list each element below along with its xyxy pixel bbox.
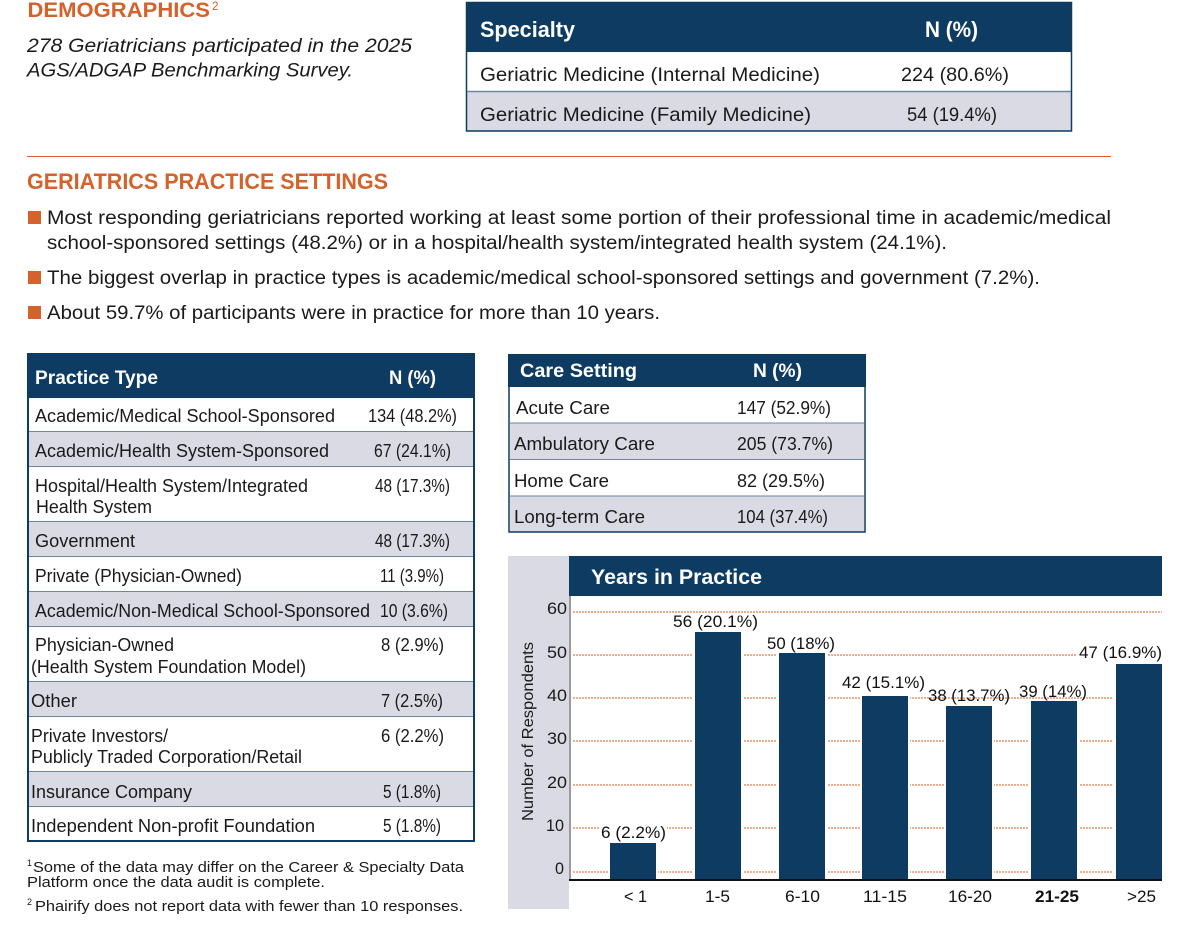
table: specialty: Geriatric Medicine (Family Medicine) [480, 104, 811, 126]
bar value labels: 56 (20.1%) [673, 612, 758, 631]
y axis tick labels: 10 [546, 817, 564, 835]
bar value labels: 47 (16.9%) [1079, 643, 1162, 662]
table: care setting: Long-term Care [514, 507, 645, 527]
table: care setting: 205 (73.7%) [737, 434, 833, 454]
x axis labels: 16-20 [948, 887, 992, 906]
table: specialty: N (%) [925, 17, 978, 42]
table: practice type: Insurance Company [31, 782, 192, 802]
table: care setting: 104 (37.4%) [737, 507, 828, 527]
table: care setting: Home Care [514, 471, 609, 491]
y axis tick labels [546, 600, 567, 878]
table: practice type: Academic/Non-Medical School-Sponsored [35, 601, 370, 621]
x axis labels: 1-5 [705, 887, 730, 906]
table: care setting: Ambulatory Care [514, 434, 655, 454]
bar value labels: 39 (14%) [1019, 682, 1087, 701]
chart axis panel [508, 556, 569, 909]
x axis labels: >25 [1127, 887, 1156, 906]
table: care setting: 147 (52.9%) [737, 398, 831, 418]
table: practice type: 134 (48.2%) [368, 406, 457, 426]
table: practice type: 5 (1.8%) [383, 816, 441, 836]
table: practice type: Health System [36, 497, 152, 517]
text block: survey participation: 278 Geriatricians participated in the 2025 [26, 36, 412, 57]
table: practice type: Publicly Traded Corporation/Retail [31, 747, 302, 767]
footnotes: 2 [27, 897, 32, 907]
table: practice type: Academic/Medical School-Sponsored [35, 406, 335, 426]
y axis title: Number of Respondents [520, 642, 537, 821]
bullet: academic settings: school-sponsored settings (48.2%) or in a hospital/health system/integrated health system (24.1%). [47, 233, 947, 254]
table: practice type: Academic/Health System-Sponsored [35, 441, 329, 461]
table: practice type: (Health System Foundation Model) [31, 657, 306, 677]
bar value labels: 42 (15.1%) [842, 673, 925, 692]
y axis tick labels: 60 [547, 600, 567, 618]
table: care setting [508, 354, 866, 532]
x axis labels: 6-10 [785, 887, 820, 906]
table: practice type: Practice Type [35, 367, 158, 389]
bullet: academic settings: Most responding geriatricians reported working at least some portion of their professional time in academic/medical [47, 208, 1111, 229]
bars [610, 632, 1162, 880]
table: practice type: Physician-Owned [35, 635, 174, 655]
y axis tick labels: 0 [555, 860, 564, 878]
table: care setting: 82 (29.5%) [737, 471, 825, 491]
x axis labels [624, 887, 1156, 906]
table: care setting: Acute Care [516, 398, 610, 418]
bullet list: key findings [28, 208, 1111, 324]
footnotes: Some of the data may differ on the Career & Specialty Data [33, 860, 465, 876]
table: specialty: 224 (80.6%) [901, 64, 1009, 86]
table: specialty: 54 (19.4%) [907, 104, 997, 126]
footnotes: 1 [27, 858, 32, 868]
table: practice type: 11 (3.9%) [380, 566, 444, 586]
text block: survey participation [26, 36, 412, 82]
table: care setting: Care Setting [520, 360, 637, 382]
table: practice type: Private Investors/ [31, 726, 168, 746]
table: practice type: 6 (2.2%) [381, 726, 444, 746]
table: practice type: 10 (3.6%) [380, 601, 448, 621]
heading: geriatrics practice settings: GERIATRICS PRACTICE SETTINGS [27, 169, 388, 194]
bar value labels: 6 (2.2%) [601, 823, 666, 842]
y axis tick labels: 40 [547, 687, 567, 705]
footnotes: Phairify does not report data with fewer than 10 responses. [35, 899, 463, 915]
table: practice type: 48 (17.3%) [375, 476, 450, 496]
table: practice type: Government [35, 531, 135, 551]
table: practice type: 67 (24.1%) [374, 441, 451, 461]
bullet: overlap: The biggest overlap in practice types is academic/medical school-sponsored settings and government (7.2%). [47, 268, 1040, 289]
bullet: years in practice: About 59.7% of participants were in practice for more than 10 years. [47, 303, 660, 324]
table: practice type [27, 353, 475, 841]
footnotes [27, 858, 465, 915]
bar value labels: 50 (18%) [767, 634, 835, 653]
table: specialty: Geriatric Medicine (Internal Medicine) [480, 64, 820, 86]
chart: years in practice [508, 556, 1162, 909]
table: practice type: 48 (17.3%) [375, 531, 450, 551]
table: practice type: 7 (2.5%) [381, 691, 443, 711]
y axis tick labels: 30 [547, 730, 567, 748]
footnotes: Platform once the data audit is complete. [27, 875, 325, 891]
table: care setting: N (%) [753, 360, 802, 382]
bullet: academic settings [28, 208, 1111, 254]
table: practice type: N (%) [389, 367, 436, 389]
table: practice type: Independent Non-profit Foundation [31, 816, 315, 836]
table: specialty [466, 2, 1072, 131]
chart title bar: Years in Practice [591, 566, 762, 589]
y axis tick labels: 20 [547, 774, 567, 792]
y axis tick labels: 50 [547, 644, 567, 662]
chart title bar [569, 556, 1162, 596]
bar value labels [600, 612, 1162, 842]
table: practice type: 8 (2.9%) [381, 635, 444, 655]
table: specialty: Specialty [480, 17, 576, 42]
table: practice type: 5 (1.8%) [383, 782, 441, 802]
x axis labels: < 1 [624, 887, 647, 906]
table: practice type: Private (Physician-Owned) [35, 566, 242, 586]
x axis labels: 11-15 [863, 887, 907, 906]
table: practice type: Hospital/Health System/Integrated [35, 476, 308, 496]
table: practice type: Other [31, 691, 77, 711]
x axis labels: 21-25 [1035, 887, 1079, 906]
bar value labels: 38 (13.7%) [928, 686, 1010, 705]
text block: survey participation: AGS/ADGAP Benchmarking Survey. [26, 60, 353, 82]
